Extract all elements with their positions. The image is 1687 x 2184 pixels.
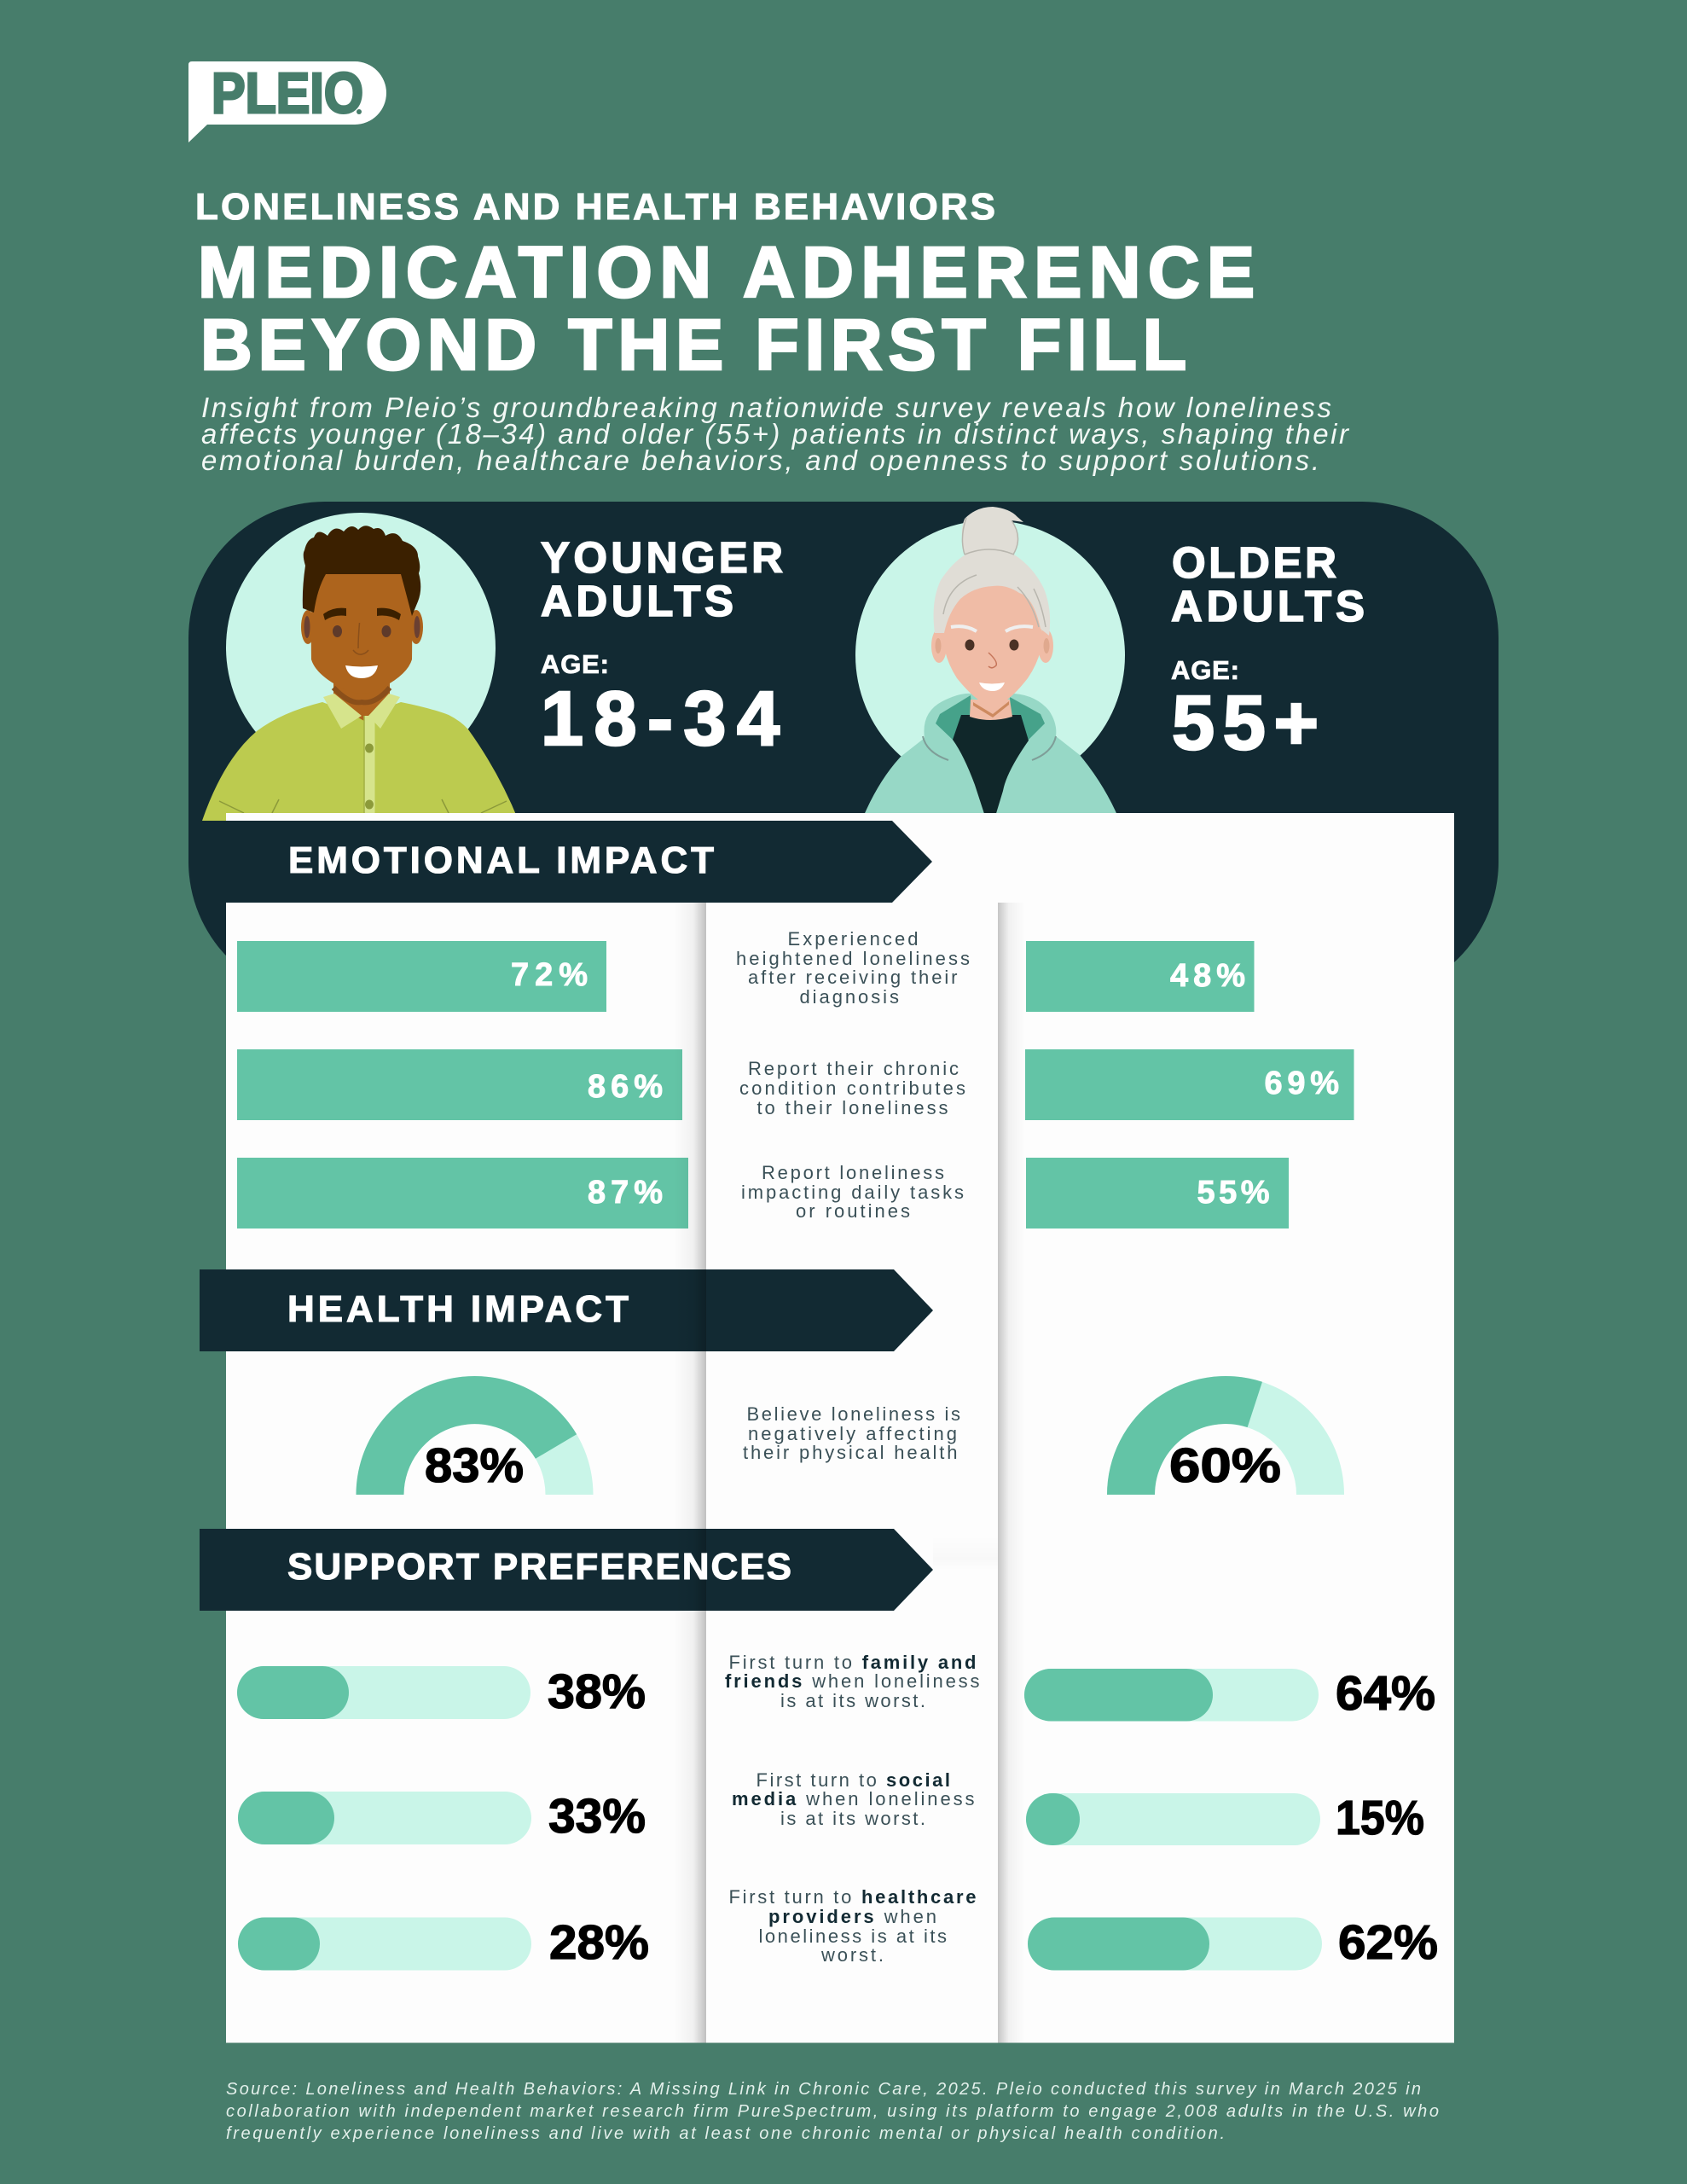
bar chart: emotional impact younger: 86%: [588, 1069, 663, 1105]
center text: support descriptions: is at its worst.: [780, 1690, 925, 1711]
younger adults label: AGE:: [541, 649, 609, 679]
progress bars: support younger: 33%: [548, 1789, 646, 1844]
center text: emotional impact descriptions: [736, 928, 970, 1222]
center text: health impact description: their physical health: [743, 1442, 957, 1463]
center text: emotional impact descriptions: or routines: [796, 1200, 910, 1222]
title: MEDICATION ADHERENCE: [198, 232, 1255, 312]
center text: emotional impact descriptions: Experienced: [788, 928, 918, 950]
heading: support preferences: SUPPORT PREFERENCES: [287, 1546, 791, 1588]
older adults label: AGE:: [1171, 655, 1239, 685]
younger adults label: [541, 533, 783, 762]
bar chart: emotional impact older: [1025, 941, 1354, 1228]
source footnote: collaboration with independent market research firm PureSpectrum, using its platform to engage 2,008 adults in the U.S. who: [226, 2102, 1439, 2121]
progress bars: support younger: 28%: [549, 1915, 649, 1970]
logo: Pleio speech bubble: [188, 61, 386, 142]
center column shadows: [674, 903, 1025, 2042]
center text: health impact description: negatively affecting: [748, 1423, 957, 1444]
older adults label: ADULTS: [1171, 582, 1365, 630]
bar chart: emotional impact younger: 87%: [588, 1175, 663, 1211]
center text: support descriptions: First turn to social: [756, 1769, 950, 1791]
gauge: older 60%: [1107, 1376, 1344, 1495]
center text: emotional impact descriptions: Report their chronic: [748, 1058, 959, 1079]
center text: support descriptions: [725, 1652, 979, 1966]
heading: health impact: HEALTH IMPACT: [287, 1288, 629, 1330]
progress bars: support younger: 38%: [548, 1664, 646, 1719]
younger adults label: 18-34: [541, 677, 780, 762]
progress bars: support older: 15%: [1336, 1791, 1424, 1845]
bar chart: emotional impact older: 55%: [1197, 1175, 1269, 1211]
younger adults label: YOUNGER: [541, 533, 783, 582]
source footnote: Source: Loneliness and Health Behaviors: A Missing Link in Chronic Care, 2025. Pleio conducted this survey in March 2025 in: [226, 2080, 1421, 2099]
older adults label: OLDER: [1172, 538, 1336, 587]
center text: support descriptions: friends when loneliness: [725, 1670, 979, 1692]
intro text: [201, 392, 1350, 476]
source footnote: [226, 2080, 1439, 2143]
title: [198, 232, 1255, 385]
banner: support preferences: [200, 1529, 933, 1611]
center text: health impact description: [743, 1403, 960, 1463]
center text: support descriptions: is at its worst.: [780, 1808, 925, 1829]
kicker heading: LONELINESS AND HEALTH BEHAVIORS: [195, 186, 995, 228]
older adults label: [1171, 538, 1365, 766]
intro text: emotional burden, healthcare behaviors, and openness to support solutions.: [201, 444, 1319, 476]
panel: white data area: [226, 813, 1454, 2042]
center text: support descriptions: First turn to family and: [728, 1652, 976, 1673]
illustration: older adult: [855, 507, 1125, 819]
center text: emotional impact descriptions: to their loneliness: [757, 1097, 948, 1118]
gauge: younger 83%: [357, 1376, 594, 1495]
younger adults label: ADULTS: [541, 577, 733, 625]
progress bars: support younger: [237, 1664, 649, 1971]
heading: emotional impact: EMOTIONAL IMPACT: [288, 839, 714, 881]
center text: emotional impact descriptions: impacting daily tasks: [741, 1182, 964, 1203]
panel: dark header backdrop: [188, 502, 1499, 998]
center text: emotional impact descriptions: heightened loneliness: [736, 948, 970, 969]
logo: Pleio speech bubble: PLEIO: [212, 61, 363, 125]
center text: support descriptions: providers when: [768, 1906, 936, 1927]
center text: emotional impact descriptions: condition contributes: [739, 1077, 965, 1099]
bar chart: emotional impact younger: 72%: [511, 957, 588, 993]
progress bars: support older: 64%: [1336, 1666, 1435, 1721]
bar chart: emotional impact older: 69%: [1264, 1066, 1339, 1101]
bar chart: emotional impact younger: [237, 941, 688, 1228]
gauge: younger 83%: 83%: [425, 1438, 524, 1493]
center text: emotional impact descriptions: Report loneliness: [762, 1162, 944, 1183]
center text: support descriptions: First turn to healthcare: [728, 1886, 976, 1908]
center text: support descriptions: media when loneliness: [732, 1788, 974, 1809]
source footnote: frequently experience loneliness and live with at least one chronic mental or physical health condition.: [226, 2124, 1225, 2143]
banner: emotional impact: [198, 821, 932, 903]
gauge: older 60%: 60%: [1169, 1438, 1281, 1493]
older adults label: 55+: [1172, 681, 1319, 766]
progress bars: support older: 62%: [1338, 1915, 1438, 1970]
center text: support descriptions: loneliness is at its: [759, 1926, 947, 1947]
banner: health impact: [200, 1269, 933, 1351]
illustration: younger adult: [202, 513, 519, 821]
bar chart: emotional impact older: 48%: [1170, 958, 1245, 994]
title: BEYOND THE FIRST FILL: [200, 305, 1186, 385]
intro text: affects younger (18–34) and older (55+) patients in distinct ways, shaping their: [201, 418, 1350, 450]
center text: emotional impact descriptions: after receiving their: [748, 967, 957, 988]
center text: support descriptions: worst.: [820, 1944, 884, 1966]
center text: emotional impact descriptions: diagnosis: [800, 986, 899, 1008]
progress bars: support older: [1024, 1666, 1438, 1971]
center text: health impact description: Believe loneliness is: [747, 1403, 960, 1425]
intro text: Insight from Pleio’s groundbreaking nationwide survey reveals how loneliness: [201, 392, 1331, 423]
